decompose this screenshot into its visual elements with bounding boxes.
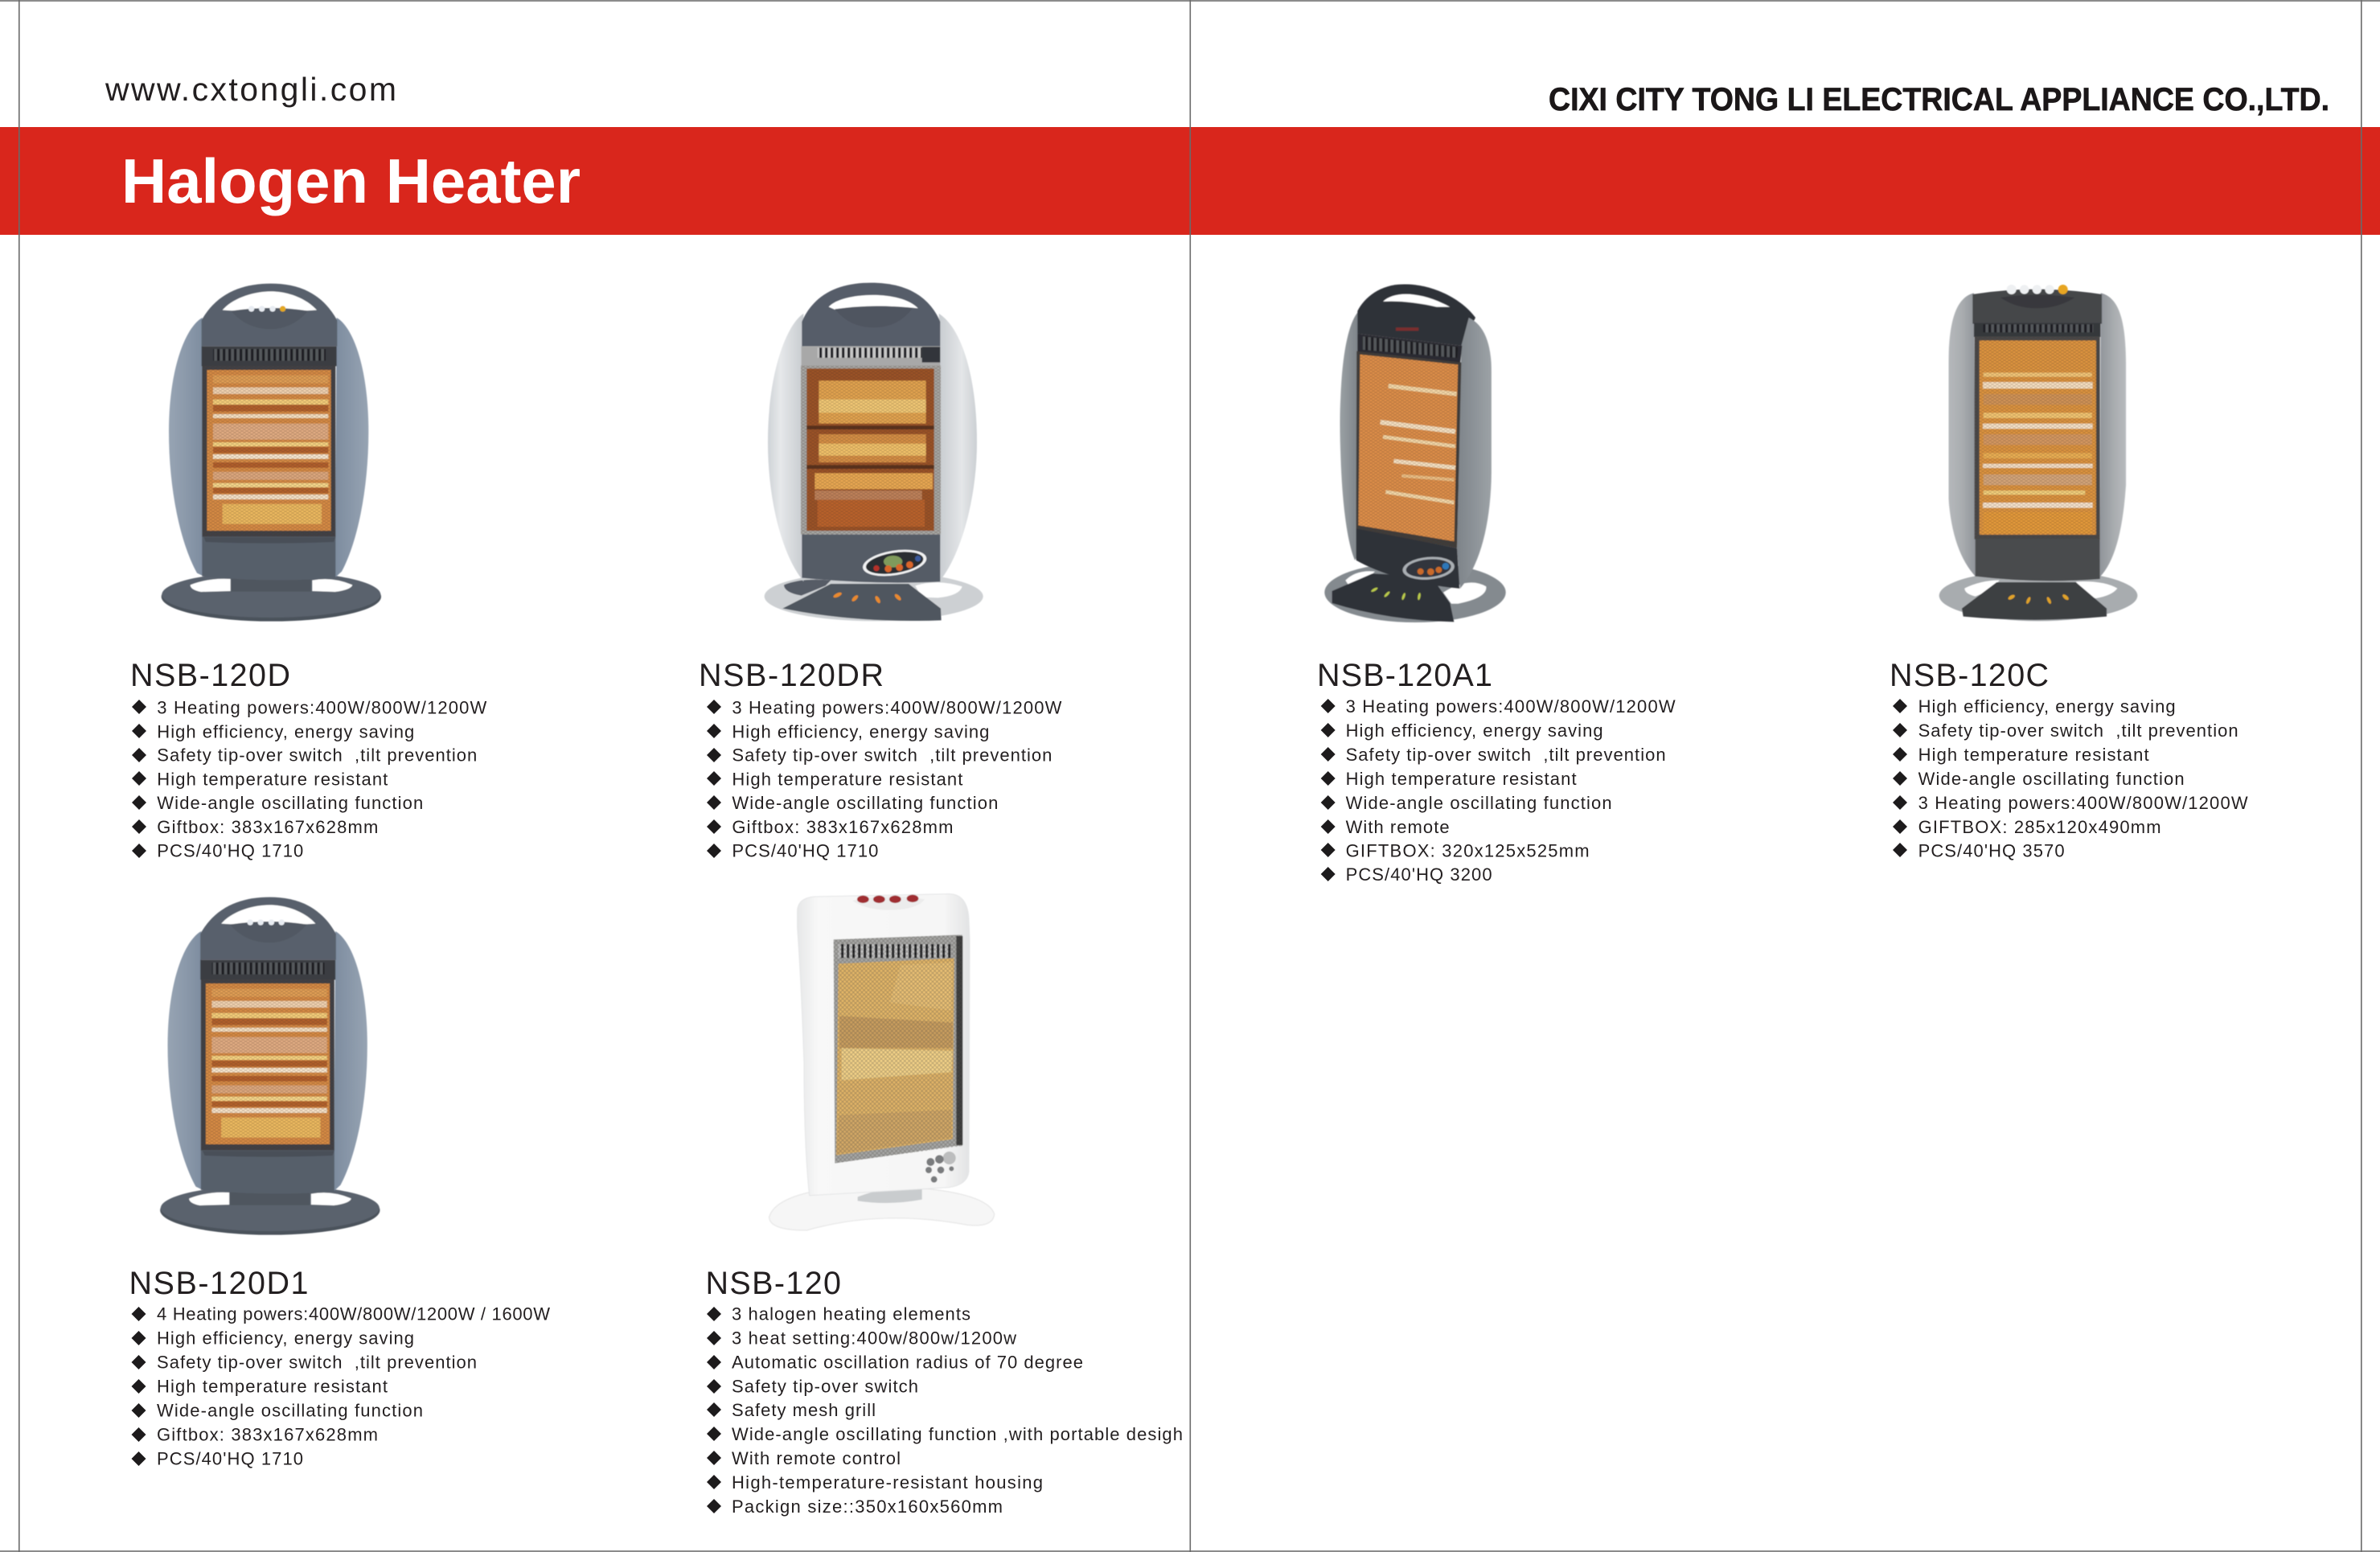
- feature list: High efficiency, energy saving: [157, 721, 414, 741]
- feature list: Wide-angle oscillating function: [1346, 793, 1612, 813]
- panel: NSB-120D: [130, 284, 487, 861]
- heater image: NSB-120A1: [1324, 284, 1506, 622]
- feature list: 4 Heating powers:400W/800W/1200W / 1600W: [157, 1304, 550, 1324]
- heater image: NSB-120C: [1939, 285, 2137, 621]
- heater image: NSB-120D1: [160, 897, 380, 1235]
- feature list: Giftbox: 383x167x628mm: [732, 817, 953, 837]
- feature list: Safety tip-over switch ,tilt prevention: [1346, 745, 1666, 765]
- feature list: 3 Heating powers:400W/800W/1200W: [732, 697, 1062, 717]
- feature list: PCS/40'HQ 1710: [157, 1449, 303, 1469]
- feature list: GIFTBOX: 320x125x525mm: [1346, 840, 1590, 860]
- feature list: PCS/40'HQ 3200: [1346, 864, 1492, 885]
- feature list: High efficiency, energy saving: [157, 1328, 414, 1349]
- company name: CIXI CITY TONG LI ELECTRICAL APPLIANCE CO.,LTD.: [1549, 82, 2329, 117]
- heater image: NSB-120: [769, 894, 995, 1230]
- feature list: Wide-angle oscillating function: [157, 793, 423, 813]
- feature list: Safety tip-over switch ,tilt prevention: [732, 745, 1052, 765]
- feature list: 3 heat setting:400w/800w/1200w: [732, 1328, 1016, 1349]
- panel: NSB-120C: [1890, 285, 2248, 860]
- feature list: 3 Heating powers:400W/800W/1200W: [157, 697, 487, 717]
- feature list: With remote control: [732, 1448, 901, 1468]
- feature list: Wide-angle oscillating function ,with portable desigh: [732, 1424, 1183, 1444]
- feature list: High efficiency, energy saving: [1346, 721, 1603, 741]
- model name: NSB-120A1: [1317, 658, 1492, 693]
- feature list: High temperature resistant: [157, 1377, 388, 1397]
- feature list: 3 Heating powers:400W/800W/1200W: [1918, 793, 2248, 813]
- feature list: High temperature resistant: [157, 770, 388, 790]
- panel: NSB-120: [706, 894, 1183, 1517]
- model name: NSB-120DR: [699, 658, 884, 693]
- feature list: Safety tip-over switch ,tilt prevention: [157, 745, 477, 766]
- feature list: Safety tip-over switch: [732, 1377, 918, 1397]
- feature list: High efficiency, energy saving: [1918, 696, 2176, 716]
- panel: NSB-120DR: [699, 283, 1062, 861]
- feature list: High efficiency, energy saving: [732, 721, 989, 741]
- feature list: [132, 697, 487, 861]
- feature list: PCS/40'HQ 1710: [732, 841, 878, 861]
- heater image: NSB-120D: [162, 284, 381, 622]
- feature list: High-temperature-resistant housing: [732, 1472, 1043, 1492]
- feature list: Safety tip-over switch ,tilt prevention: [157, 1353, 477, 1373]
- feature list: Giftbox: 383x167x628mm: [157, 1425, 378, 1445]
- model name: NSB-120D: [130, 658, 290, 693]
- feature list: [1321, 696, 1676, 885]
- feature list: Safety tip-over switch ,tilt prevention: [1918, 721, 2238, 741]
- panel: NSB-120A1: [1317, 284, 1676, 885]
- feature list: [707, 697, 1062, 861]
- feature list: Automatic oscillation radius of 70 degree: [732, 1353, 1083, 1373]
- model name: NSB-120D1: [129, 1266, 309, 1301]
- red title band: [0, 127, 2380, 235]
- feature list: [1893, 696, 2248, 860]
- feature list: Wide-angle oscillating function: [157, 1401, 423, 1421]
- title: Halogen Heater: [121, 146, 581, 216]
- feature list: 3 Heating powers:400W/800W/1200W: [1346, 696, 1676, 716]
- feature list: Giftbox: 383x167x628mm: [157, 817, 378, 837]
- model name: NSB-120C: [1890, 658, 2049, 693]
- website url: www.cxtongli.com: [105, 71, 396, 108]
- heater image: NSB-120DR: [765, 283, 983, 621]
- feature list: [132, 1304, 550, 1469]
- model name: NSB-120: [706, 1266, 841, 1301]
- feature list: 3 halogen heating elements: [732, 1304, 970, 1324]
- feature list: Wide-angle oscillating function: [1918, 769, 2185, 789]
- feature list: High temperature resistant: [1918, 745, 2149, 765]
- feature list: Packign size::350x160x560mm: [732, 1497, 1003, 1517]
- feature list: Safety mesh grill: [732, 1400, 876, 1420]
- feature list: [707, 1304, 1183, 1517]
- panel: NSB-120D1: [129, 897, 550, 1469]
- feature list: High temperature resistant: [732, 769, 962, 789]
- feature list: Wide-angle oscillating function: [732, 793, 998, 813]
- feature list: PCS/40'HQ 1710: [157, 841, 303, 861]
- feature list: PCS/40'HQ 3570: [1918, 840, 2065, 860]
- icon: flower decal: [925, 1152, 956, 1183]
- feature list: High temperature resistant: [1346, 769, 1577, 789]
- feature list: GIFTBOX: 285x120x490mm: [1918, 817, 2161, 837]
- feature list: With remote: [1346, 817, 1450, 837]
